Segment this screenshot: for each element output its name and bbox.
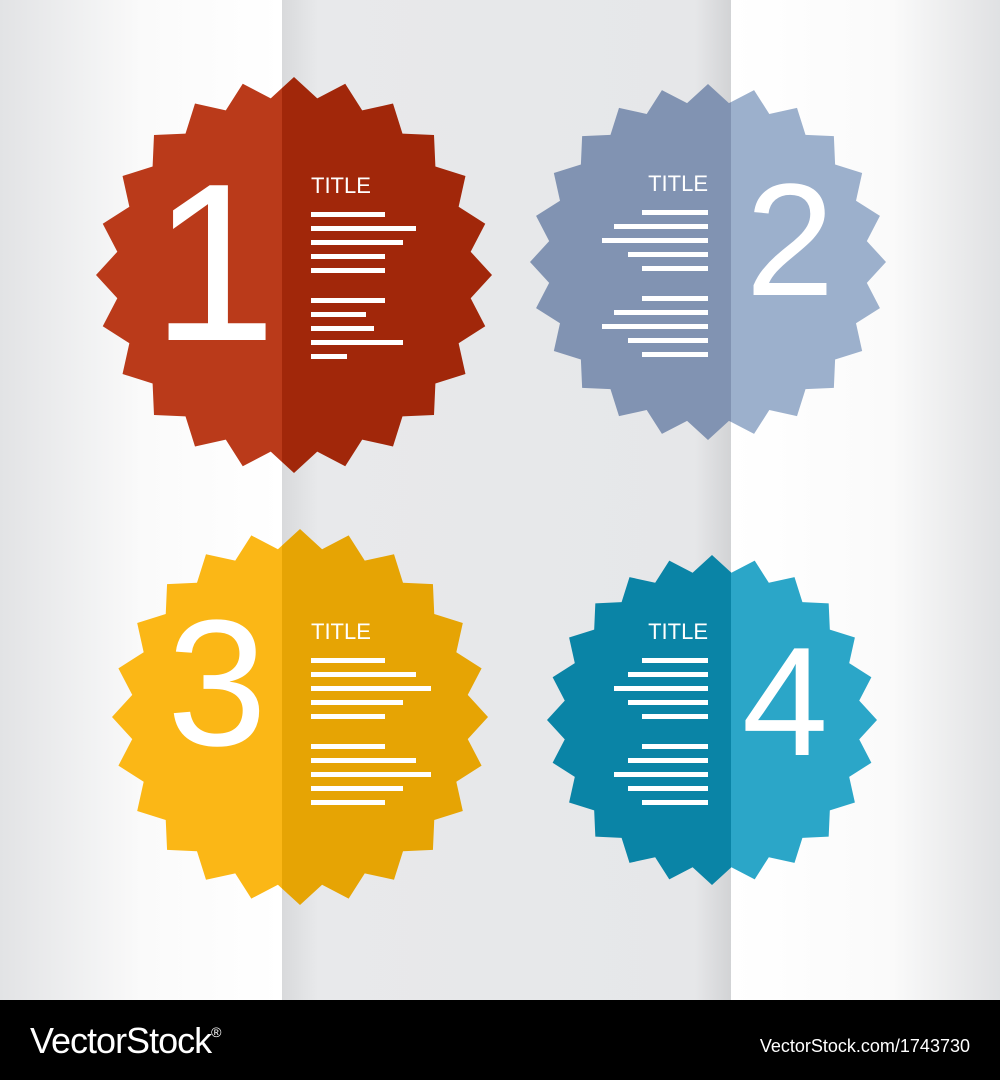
title 1: TITLE: [311, 173, 371, 198]
badge 3 (yellow): [112, 529, 488, 905]
number 3: 3: [167, 583, 267, 784]
number 4: 4: [742, 615, 828, 788]
footer logo: ®: [211, 1024, 222, 1040]
title 2: TITLE: [648, 171, 708, 196]
footer url: VectorStock.com/1743730: [760, 1036, 970, 1056]
text lines 2: [602, 210, 708, 357]
footer bar: [0, 1000, 1000, 1080]
number 2: 2: [746, 150, 834, 329]
badge 4 (teal): [547, 555, 877, 885]
badge 1 (red): [96, 77, 492, 473]
text lines 1: [311, 212, 416, 359]
text lines 4: [614, 658, 708, 805]
text lines 3: [311, 658, 431, 805]
number 1: 1: [151, 136, 277, 388]
title 3: TITLE: [311, 619, 371, 644]
badge 2 (blue-gray): [530, 84, 886, 440]
title 4: TITLE: [648, 619, 708, 644]
footer logo: VectorStock: [30, 1020, 211, 1061]
